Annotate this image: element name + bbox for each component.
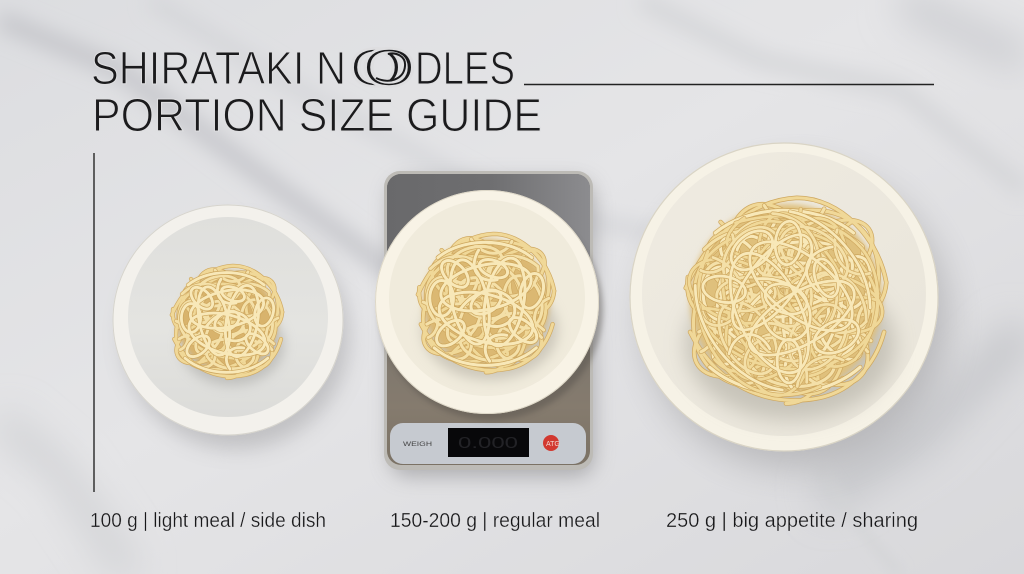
title (91, 38, 542, 141)
scale control panel: WEIGH (403, 441, 432, 448)
noodles: regular portion (399, 218, 573, 386)
red brand badge (543, 435, 560, 451)
noodles: large portion (627, 138, 945, 460)
title line two: PORTION SIZE GUIDE (92, 89, 542, 141)
title line one: SHIRATAKI N (91, 42, 346, 94)
scale display: 0.000 (458, 435, 518, 452)
title line one: O (349, 38, 403, 98)
red brand badge: ATG (546, 441, 560, 448)
kitchen scale with regular portion (375, 171, 603, 476)
title line one (91, 38, 515, 98)
scale display (448, 428, 529, 457)
large plate with 250 g noodles (627, 138, 948, 468)
caption: 150-200 g: 150-200 g | regular meal (390, 510, 600, 532)
caption: 100 g: 100 g | light meal / side dish (90, 510, 326, 532)
small plate with 100 g noodles (112, 204, 349, 449)
title rule (524, 84, 934, 86)
vertical rule (93, 153, 95, 492)
scale control panel (390, 423, 586, 464)
title line one: O (362, 38, 416, 98)
caption: 250 g: 250 g | big appetite / sharing (666, 510, 918, 532)
title line one: DLES (415, 42, 515, 94)
noodles: small portion (157, 253, 297, 389)
